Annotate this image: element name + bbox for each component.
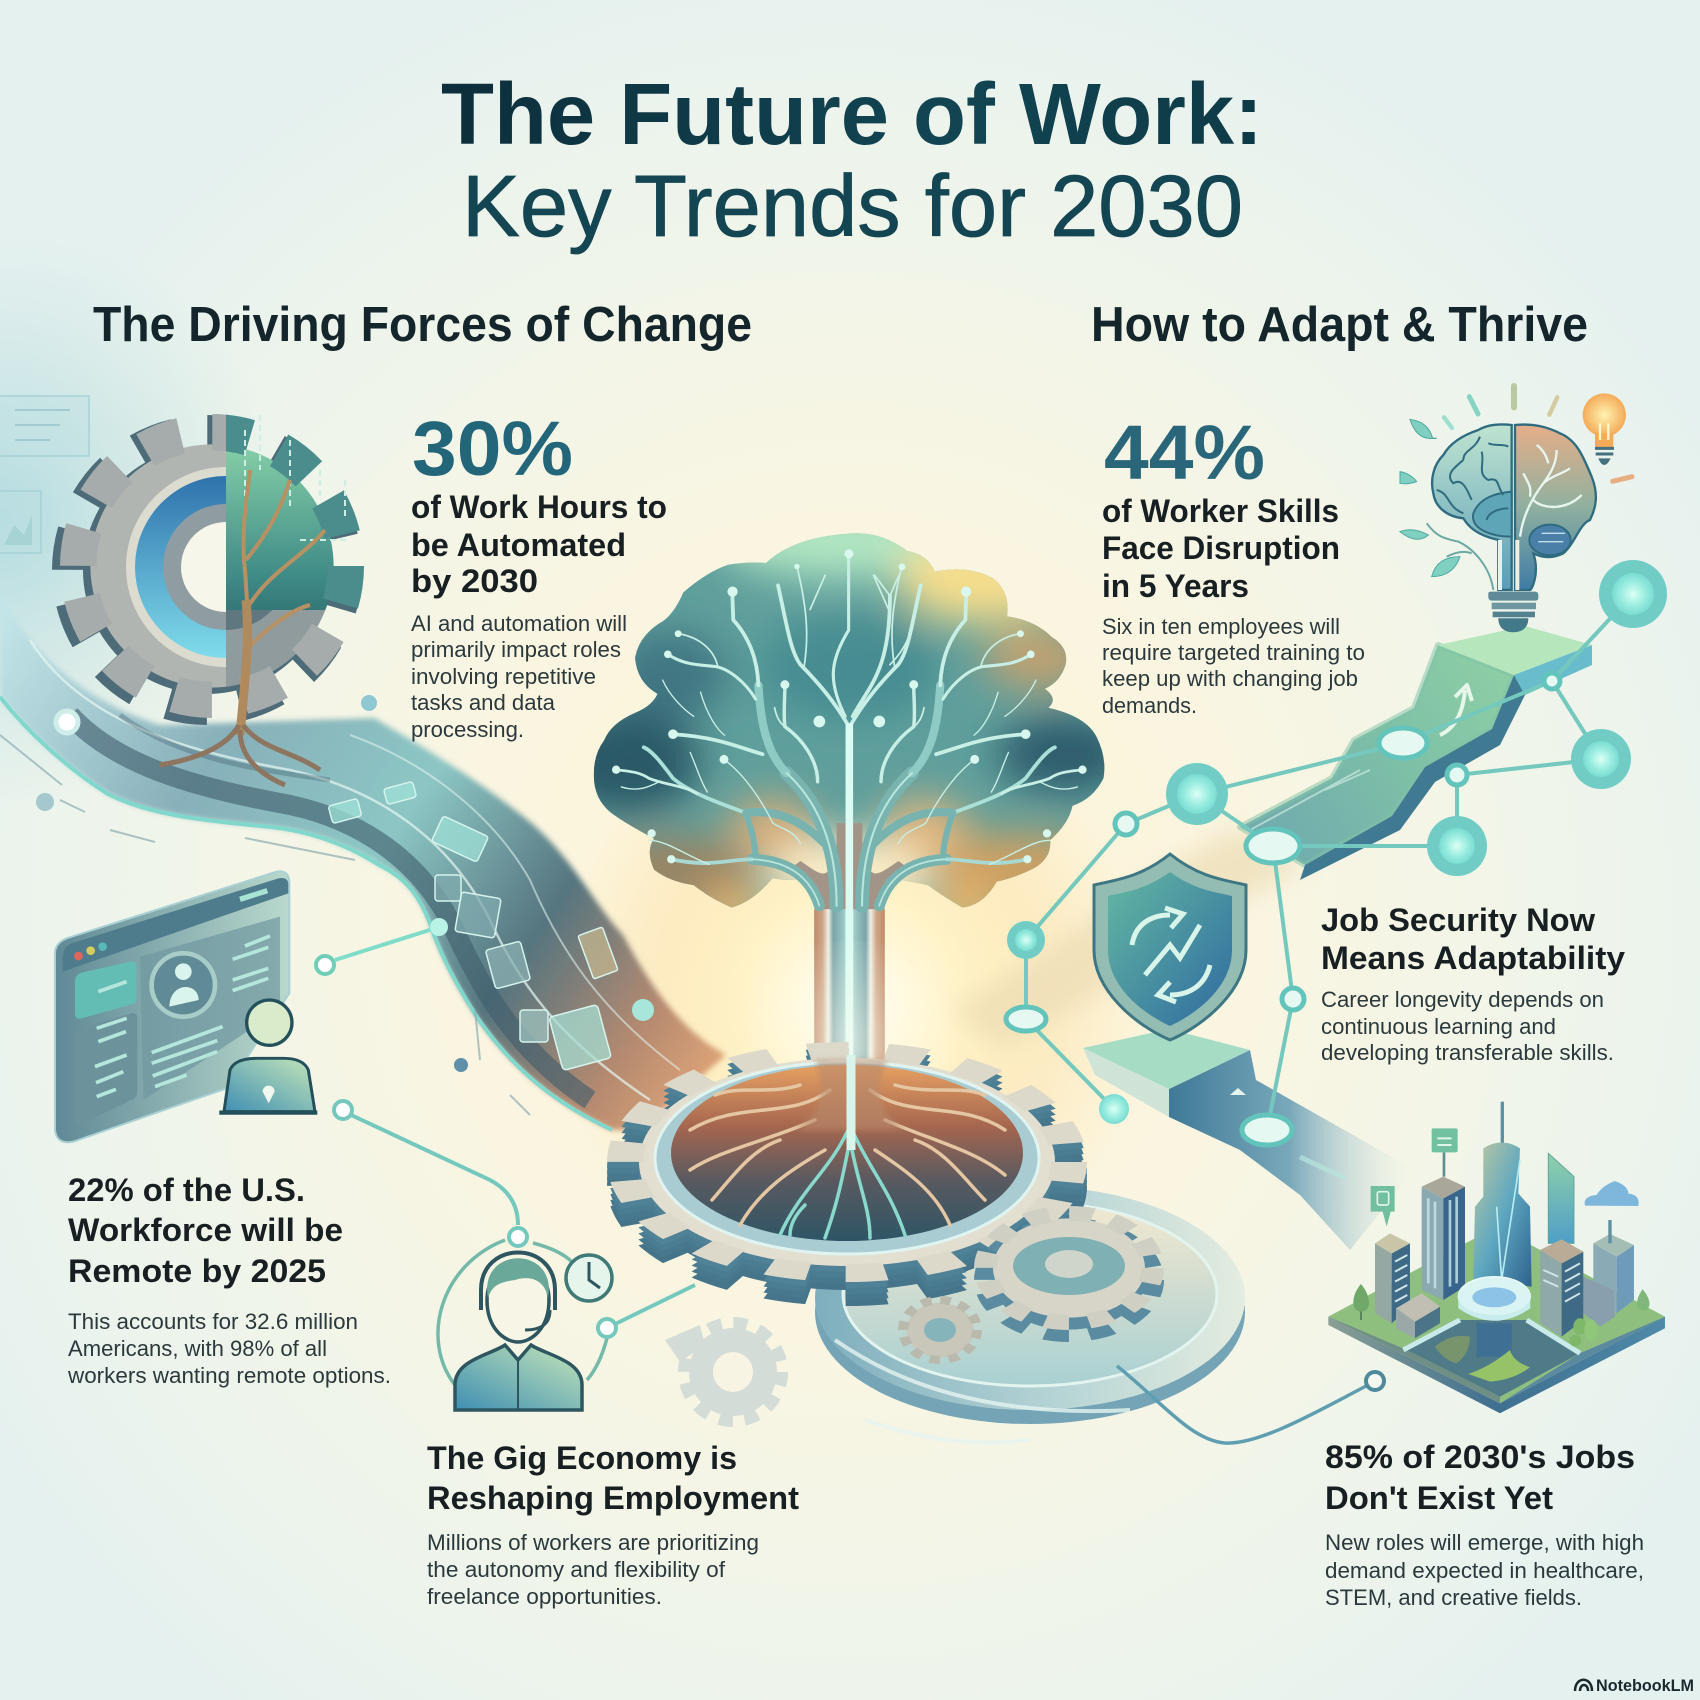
connector: ribbon to remote screen bbox=[316, 918, 448, 974]
title: The Future of Work: bbox=[441, 66, 1263, 163]
text: job security: Career longevity depends on bbox=[1321, 987, 1604, 1012]
pale gear decoration bbox=[665, 1324, 781, 1420]
connector: platform to future jobs bbox=[1117, 1366, 1384, 1443]
stat: 30 percent automation: by 2030 bbox=[411, 563, 538, 599]
text: remote workforce: Remote by 2025 bbox=[68, 1253, 326, 1289]
title bbox=[441, 66, 1263, 255]
text: gig economy bbox=[427, 1440, 799, 1609]
text: remote workforce: This accounts for 32.6 million bbox=[68, 1309, 358, 1334]
connector: remote to gig worker bbox=[334, 1101, 527, 1246]
stat: 44 percent skills: Six in ten employees will bbox=[1102, 614, 1340, 639]
heading: driving forces: The Driving Forces of Change bbox=[93, 298, 752, 352]
signs bbox=[1440, 1152, 1448, 1177]
small gears on platform bbox=[903, 1213, 1153, 1360]
watermark: NotebookLM: NotebookLM bbox=[1596, 1676, 1694, 1695]
text: gig economy: freelance opportunities. bbox=[427, 1584, 662, 1609]
stat: 30 percent automation: primarily impact roles bbox=[411, 637, 621, 662]
text: future jobs: STEM, and creative fields. bbox=[1325, 1585, 1582, 1610]
stat: 30 percent automation: tasks and data bbox=[411, 690, 555, 715]
towers bbox=[1375, 1102, 1634, 1338]
big gear with roots bbox=[625, 1051, 1069, 1297]
heading: adapt and thrive: How to Adapt & Thrive bbox=[1091, 298, 1588, 352]
stat: 44 percent skills: of Worker Skills bbox=[1102, 493, 1339, 529]
text: gig economy: Reshaping Employment bbox=[427, 1480, 799, 1516]
stat: 30 percent automation: processing. bbox=[411, 717, 524, 742]
left data ribbon bbox=[0, 594, 726, 1130]
text: gig economy: Millions of workers are prioritizing bbox=[427, 1530, 759, 1555]
text: future jobs bbox=[1325, 1439, 1644, 1610]
text: future jobs: 85% of 2030's Jobs bbox=[1325, 1439, 1635, 1475]
greenery bbox=[1358, 1307, 1363, 1320]
text: job security: Job Security Now bbox=[1321, 902, 1595, 938]
text: remote workforce bbox=[67, 1172, 391, 1388]
stat: 44 percent skills: keep up with changing job bbox=[1102, 666, 1358, 691]
stat: 44 percent skills: 44% bbox=[1104, 410, 1265, 496]
text: remote workforce: 22% of the U.S. bbox=[68, 1172, 305, 1208]
stat: 44 percent skills: demands. bbox=[1102, 693, 1197, 718]
roots bbox=[690, 1085, 1005, 1238]
stat: 44 percent skills: require targeted training to bbox=[1102, 640, 1365, 665]
text: remote workforce: Workforce will be bbox=[68, 1212, 343, 1248]
text: job security: continuous learning and bbox=[1321, 1014, 1556, 1039]
icon: gig worker with headset and clock bbox=[438, 1240, 612, 1410]
text: future jobs: demand expected in healthcare, bbox=[1325, 1558, 1644, 1583]
icon: shield with arrows bbox=[1094, 854, 1246, 1040]
icon: remote work monitor and person bbox=[55, 871, 317, 1142]
stat: 44 percent skills: in 5 Years bbox=[1102, 568, 1249, 604]
soft light over trunk base bbox=[741, 940, 961, 1140]
text: job security: Means Adaptability bbox=[1321, 940, 1625, 976]
stat: 30 percent automation: be Automated bbox=[411, 527, 626, 563]
text: remote workforce: workers wanting remote options. bbox=[67, 1363, 391, 1388]
title: Key Trends for 2030 bbox=[462, 158, 1243, 255]
node network bbox=[1006, 560, 1667, 1145]
central glow bbox=[531, 700, 1171, 1300]
faint dashboards at left edge bbox=[0, 396, 89, 553]
lower right step path bbox=[1083, 1029, 1415, 1250]
icon: brain lightbulb bbox=[1400, 386, 1632, 632]
cloud bbox=[1585, 1181, 1639, 1206]
platform disk bbox=[815, 1186, 1245, 1442]
stat: 30 percent automation: of Work Hours to bbox=[411, 489, 667, 525]
trunk and branches bbox=[612, 549, 1087, 1181]
text: job security: developing transferable skills. bbox=[1321, 1040, 1614, 1065]
text: gig economy: the autonomy and flexibility of bbox=[427, 1557, 726, 1582]
stat: 30 percent automation: AI and automation will bbox=[411, 611, 627, 636]
icon: future city bbox=[1328, 1102, 1665, 1413]
tree canopy bbox=[594, 533, 1104, 908]
stat: 30 percent automation bbox=[411, 406, 667, 742]
text: gig economy: The Gig Economy is bbox=[427, 1440, 737, 1476]
stat: 44 percent skills: Face Disruption bbox=[1102, 530, 1340, 566]
text: future jobs: New roles will emerge, with high bbox=[1325, 1530, 1644, 1555]
text: remote workforce: Americans, with 98% of all bbox=[68, 1336, 327, 1361]
connector: gig worker to gear bbox=[598, 1285, 695, 1337]
icon: half gear half circuit tree bbox=[71, 415, 350, 785]
text: job security bbox=[1321, 902, 1625, 1065]
stat: 30 percent automation: involving repetitive bbox=[411, 664, 596, 689]
stat: 30 percent automation: 30% bbox=[412, 406, 573, 492]
fountain bbox=[1477, 1323, 1512, 1357]
beige path stripe behind shield bbox=[950, 827, 1305, 1050]
data tiles on ribbon bbox=[328, 781, 618, 1071]
upper right step path with arrow bbox=[1240, 626, 1592, 880]
text: future jobs: Don't Exist Yet bbox=[1325, 1480, 1553, 1516]
stat: 44 percent skills bbox=[1102, 410, 1365, 718]
